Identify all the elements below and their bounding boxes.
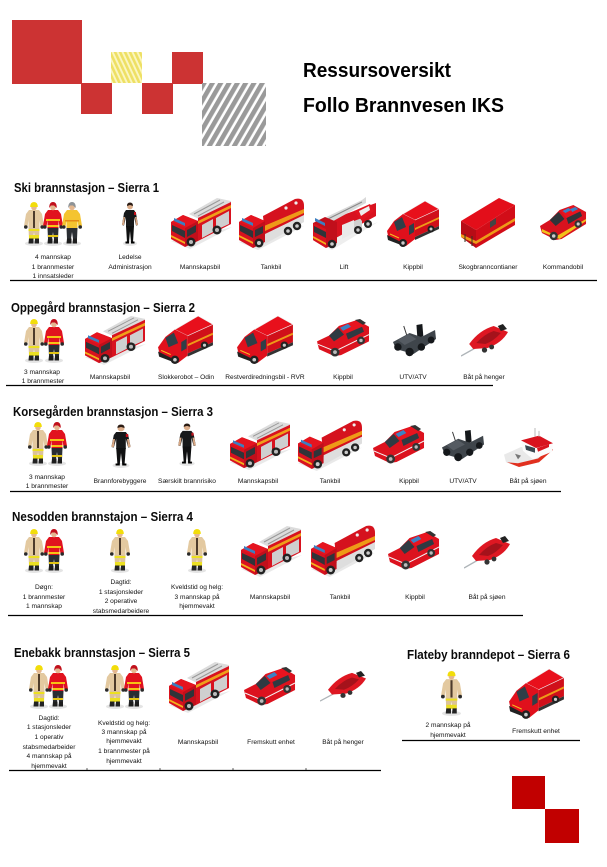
vehicle: boat on trailer: Båt på sjøen: [468, 593, 506, 601]
divider: [402, 740, 580, 742]
vehicle: Kippbil van: Kippbil: [403, 264, 423, 271]
crew: dagtid: hjemmevakt: [31, 763, 67, 770]
vehicle: UTV: UTV/ATV: [449, 478, 477, 485]
footer squares: [512, 776, 579, 843]
crew: kveldstid og helg: Kveldstid og helg:: [98, 720, 150, 727]
vehicle: Mannskapsbil: Mannskapsbil: [90, 374, 131, 381]
vehicle: Restverdiredningsbil: Restverdiredningsbil - RVR: [225, 374, 305, 381]
vehicle: Mannskapsbil: Mannskapsbil: [238, 478, 279, 485]
crew: døgn: Døgn:: [35, 584, 53, 591]
crew: kveldstid og helg: [171, 529, 223, 610]
crew: dagtid: 1 stasjonsleder: [27, 724, 72, 731]
officer: Ledelse: Administrasjon: [108, 264, 152, 271]
vehicle: boat at sea: [504, 428, 553, 485]
panel: Nesodden brannstasjon: [8, 510, 523, 616]
vehicle: Mannskapsbil: [241, 526, 302, 601]
vehicle: Kippbil: [373, 425, 424, 485]
crew: dagtid: stabsmedarbeidere: [93, 608, 150, 615]
crew: kveldstid og helg: 3 mannskap på: [174, 593, 220, 601]
crew: døgn: 1 mannskap: [26, 603, 62, 610]
crew: dagtid: 4 mannskap på: [26, 752, 72, 760]
vehicle: boat on trailer: [464, 536, 510, 601]
vehicle: Lift: Lift: [340, 264, 349, 271]
vehicle: Tankbil: Tankbil: [330, 594, 351, 601]
crew: 3 mannskap: 3 mannskap: [24, 369, 60, 376]
vehicle: Tankbil: [298, 421, 362, 485]
officer: Særskilt brannrisiko: Særskilt brannrisiko: [158, 478, 216, 485]
crew: 3 mannskap: [22, 319, 65, 385]
header logo squares: [12, 20, 266, 146]
panel: Oppegård brannstasjon: [6, 301, 508, 386]
vehicle: Tankbil: Tankbil: [320, 478, 341, 485]
vehicle: Skogbrann container: Skogbranncontianer: [458, 264, 518, 271]
heading: Flateby: Flateby branndepot – Sierra 6: [407, 648, 570, 662]
vehicle: Kippbil: Kippbil: [405, 594, 425, 601]
vehicle: Fremskutt enhet: Fremskutt enhet: [247, 739, 295, 746]
heading: Nesodden: Nesodden brannstajon – Sierra 4: [12, 510, 193, 524]
officer: Særskilt brannrisiko: [158, 423, 216, 485]
crew: 4 mannskap: 1 brannmester: [32, 264, 75, 271]
panel: Enebakk brannstasjon: [9, 646, 381, 770]
vehicle: Skogbrann container: [458, 198, 518, 271]
divider: [10, 280, 597, 282]
vehicle: Fremskutt enhet: [509, 669, 564, 735]
panel: Flateby branndepot: [402, 648, 580, 740]
officer: Brannforebyggere: Brannforebyggere: [94, 478, 147, 485]
vehicle: Kippbil: Kippbil: [399, 478, 419, 485]
crew: dagtid: [23, 665, 76, 770]
crew: døgn: [23, 529, 66, 610]
vehicle: Tankbil: Tankbil: [261, 264, 282, 271]
crew: 2 mannskap: 2 mannskap på: [425, 721, 471, 729]
crew: dagtid: 1 stasjonsleder: [99, 589, 144, 596]
heading: Ski: Ski brannstasjon – Sierra 1: [14, 181, 159, 195]
panel: Korsegården brannstasjon: [10, 405, 561, 492]
crew: kveldstid og helg: 1 brannmester på: [98, 747, 150, 755]
crew: kveldstid og helg: hjemmevakt: [106, 738, 142, 745]
vehicle: boat on trailer: [461, 324, 508, 381]
crew: kveldstid og helg: hjemmevakt: [179, 603, 215, 610]
crew: 2 mannskap: [425, 671, 471, 739]
title: [303, 60, 504, 117]
vehicle: UTV: UTV/ATV: [399, 374, 427, 381]
crew: dagtid: stabsmedarbeider: [23, 744, 76, 751]
vehicle: Kippbil: [388, 531, 439, 601]
crew: 3 mannskap: 1 brannmester: [22, 378, 65, 385]
crew: 4 mannskap: [24, 202, 82, 280]
vehicle: Mannskapsbil: Mannskapsbil: [180, 264, 221, 271]
vehicle: Kommandobil: Kommandobil: [543, 264, 584, 271]
crew: 4 mannskap: 4 mannskap: [35, 254, 71, 261]
vehicle: Mannskapsbil: [171, 198, 232, 271]
vehicle: Tankbil: [311, 526, 375, 601]
officer: Ledelse: Ledelse: [118, 254, 142, 261]
title: Follo Brannvesen IKS: [303, 95, 504, 117]
vehicle: Kippbil: [317, 319, 369, 381]
heading: Enebakk: Enebakk brannstasjon – Sierra 5: [14, 646, 190, 660]
crew: kveldstid og helg: [98, 665, 150, 765]
panel: Ski brannstasjon: [10, 181, 597, 280]
vehicle: boat on trailer: Båt på henger: [322, 738, 365, 746]
vehicle: Slokkerobot: [158, 316, 214, 381]
vehicle: Mannskapsbil: Mannskapsbil: [178, 739, 219, 746]
crew: kveldstid og helg: 3 mannskap på: [101, 728, 147, 736]
vehicle: boat on trailer: [320, 671, 366, 746]
vehicle: UTV: [442, 430, 484, 485]
vehicle: Slokkerobot: Slokkerobot – Odin: [158, 374, 214, 381]
vehicle: Fremskutt enhet: [244, 667, 295, 746]
divider: [8, 614, 523, 616]
crew: dagtid: [93, 529, 150, 615]
vehicle: Kommandobil: [540, 205, 586, 271]
vehicle: Kippbil: Kippbil: [333, 374, 353, 381]
crew: dagtid: 1 operativ: [35, 734, 64, 741]
title: Ressursoversikt: [303, 60, 451, 82]
crew: kveldstid og helg: hjemmevakt: [106, 758, 142, 765]
vehicle: Mannskapsbil: [85, 316, 146, 381]
vehicle: Lift: [313, 197, 378, 271]
vehicle: Mannskapsbil: [169, 662, 230, 746]
vehicle: Mannskapsbil: Mannskapsbil: [250, 594, 291, 601]
vehicle: UTV: [393, 324, 436, 381]
divider: [9, 768, 381, 770]
divider: [6, 384, 493, 386]
vehicle: Fremskutt enhet: Fremskutt enhet: [512, 728, 560, 735]
vehicle: Kippbil van: [387, 201, 439, 271]
officer: Ledelse: [108, 202, 152, 271]
crew: dagtid: 2 operative: [105, 598, 138, 605]
crew: 4 mannskap: 1 innsatsleder: [32, 273, 74, 280]
vehicle: Mannskapsbil: [230, 421, 291, 485]
vehicle: Restverdiredningsbil: [225, 316, 305, 381]
crew: 3 mannskap: 3 mannskap: [29, 474, 65, 481]
vehicle: boat at sea: Båt på sjøen: [509, 477, 547, 485]
heading: Oppegård: Oppegård brannstasjon – Sierra 2: [11, 301, 195, 315]
crew: 3 mannskap: 1 brannmester: [26, 483, 69, 490]
crew: døgn: 1 brannmester: [23, 594, 66, 601]
crew: 2 mannskap: hjemmevakt: [430, 732, 466, 739]
crew: dagtid: Dagtid:: [39, 715, 60, 722]
crew: 3 mannskap: [26, 422, 69, 490]
divider: [10, 490, 561, 492]
heading: Korsegården: Korsegården brannstasjon – Sierra 3: [13, 405, 213, 419]
vehicle: boat on trailer: Båt på henger: [463, 373, 506, 381]
officer: Brannforebyggere: [94, 424, 147, 485]
crew: kveldstid og helg: Kveldstid og helg:: [171, 584, 223, 591]
vehicle: Tankbil: [239, 199, 304, 271]
crew: dagtid: Dagtid:: [111, 579, 132, 586]
